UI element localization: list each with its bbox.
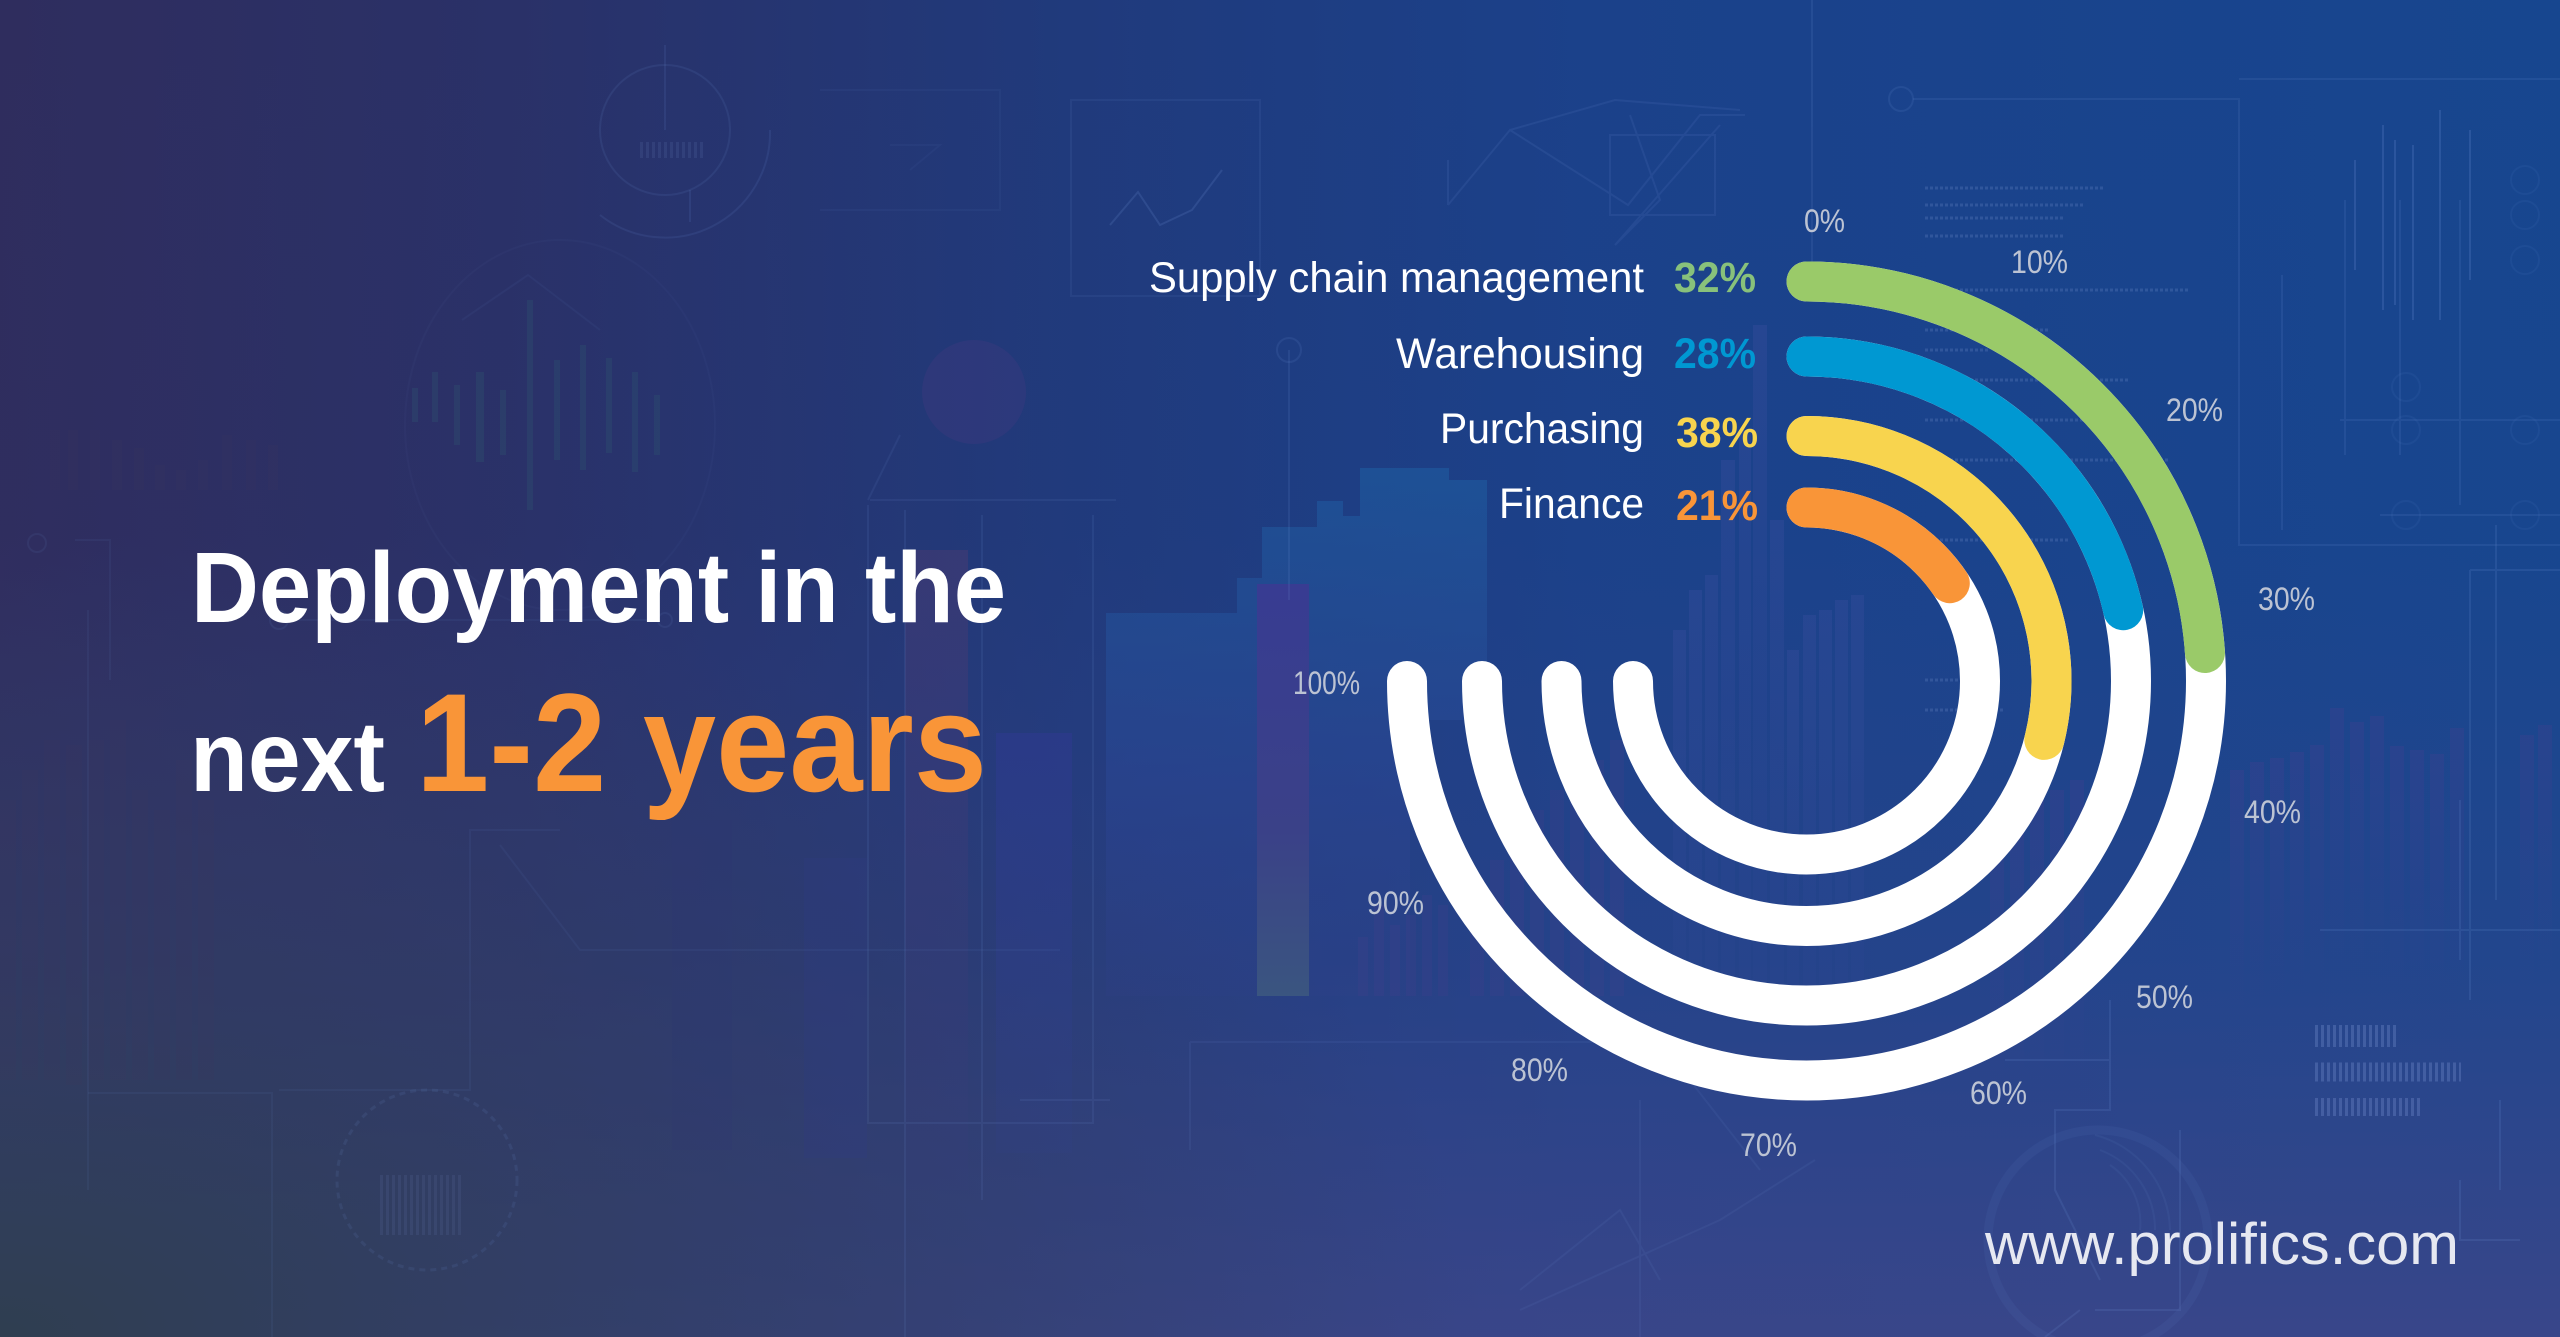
percentage scale labels: 60% [1970, 1075, 2027, 1111]
background: small hatched blocks [380, 150, 2461, 1205]
percentage scale labels: 30% [2258, 581, 2315, 617]
value: 38%: 38% [1676, 409, 1758, 457]
title [190, 532, 1006, 821]
label: finance: Finance [1499, 480, 1644, 528]
percentage scale labels [1293, 203, 2315, 1163]
white ring tracks [1407, 282, 2206, 1080]
percentage scale labels: 20% [2166, 392, 2223, 428]
percentage scale labels: 100% [1293, 665, 1360, 701]
legend labels [1149, 254, 1644, 528]
background: faint bar blocks [0, 300, 2552, 1190]
background: faint text-like rows near the rings [1925, 188, 2190, 710]
percentage scale labels: 10% [2011, 244, 2068, 280]
percentage scale labels: 80% [1511, 1052, 1568, 1088]
arc: finance 21% [1806, 508, 1950, 583]
tall bars behind the rings [1673, 325, 1864, 996]
title highlight: 1-2 years [416, 664, 987, 821]
label: purchasing: Purchasing [1440, 405, 1644, 453]
left bars band [0, 430, 278, 1085]
right bars band [1990, 708, 2552, 1090]
percentage scale labels: 40% [2244, 794, 2301, 830]
value: 21%: 21% [1676, 482, 1758, 530]
label: warehousing: Warehousing [1396, 330, 1644, 378]
purple circle [922, 340, 1026, 444]
website url: www.prolifics.com [1984, 1212, 2459, 1277]
arc: supply chain management 32% [1806, 282, 2205, 653]
title line 1: Deployment in the [191, 532, 1006, 644]
arc: warehousing 28% [1806, 356, 2123, 610]
legend values [1674, 254, 1758, 530]
title line 2: next [190, 701, 385, 813]
percentage scale labels: 70% [1740, 1127, 1797, 1163]
arc: purchasing 38% [1806, 436, 2051, 740]
radial bar chart [1407, 282, 2206, 1080]
percentage scale labels: 50% [2136, 979, 2193, 1015]
percentage scale labels: 0% [1804, 203, 1845, 239]
percentage scale labels: 90% [1367, 885, 1424, 921]
center shield bars [412, 300, 660, 510]
value: 28%: 28% [1674, 330, 1756, 378]
low bars, lower chart band [1358, 740, 1624, 996]
label: supply chain management: Supply chain management [1149, 254, 1644, 302]
value: 32%: 32% [1674, 254, 1756, 302]
